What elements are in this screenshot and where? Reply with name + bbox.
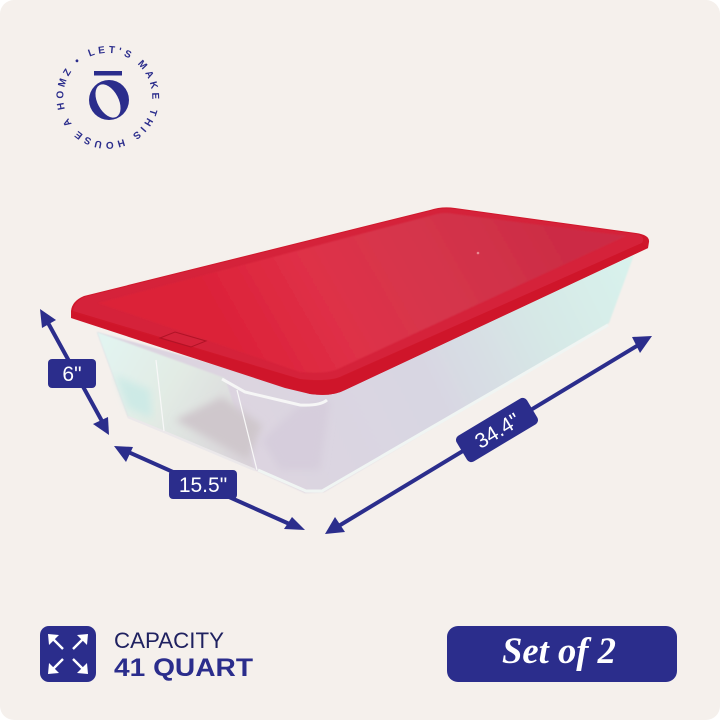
set of 2 badge: Set of 2 xyxy=(502,631,616,672)
dimension: width 15.5 inches xyxy=(114,446,305,530)
dimension: width 15.5 inches: 15.5" xyxy=(179,474,227,497)
dimension: length 34.4 inches: 34.4" xyxy=(471,409,524,454)
red lid xyxy=(71,207,649,395)
dimension: height 6 inches: 6" xyxy=(62,363,82,386)
storage container photo xyxy=(71,207,649,493)
logo mark: o with bar xyxy=(89,71,129,122)
capacity label: CAPACITY xyxy=(114,628,224,653)
capacity value: 41 QUART xyxy=(114,654,253,682)
lid top surface xyxy=(73,208,643,380)
capacity icon xyxy=(40,626,96,682)
dimension: length 34.4 inches xyxy=(325,336,652,534)
dimension: height 6 inches xyxy=(40,309,109,435)
clear container body xyxy=(97,255,634,493)
embossed logo on lid xyxy=(160,332,206,347)
set of 2 badge xyxy=(447,626,677,682)
logo badge xyxy=(56,46,160,149)
circular slogan: LET'S MAKE THIS HOUSE A HOMZ • xyxy=(56,46,160,149)
